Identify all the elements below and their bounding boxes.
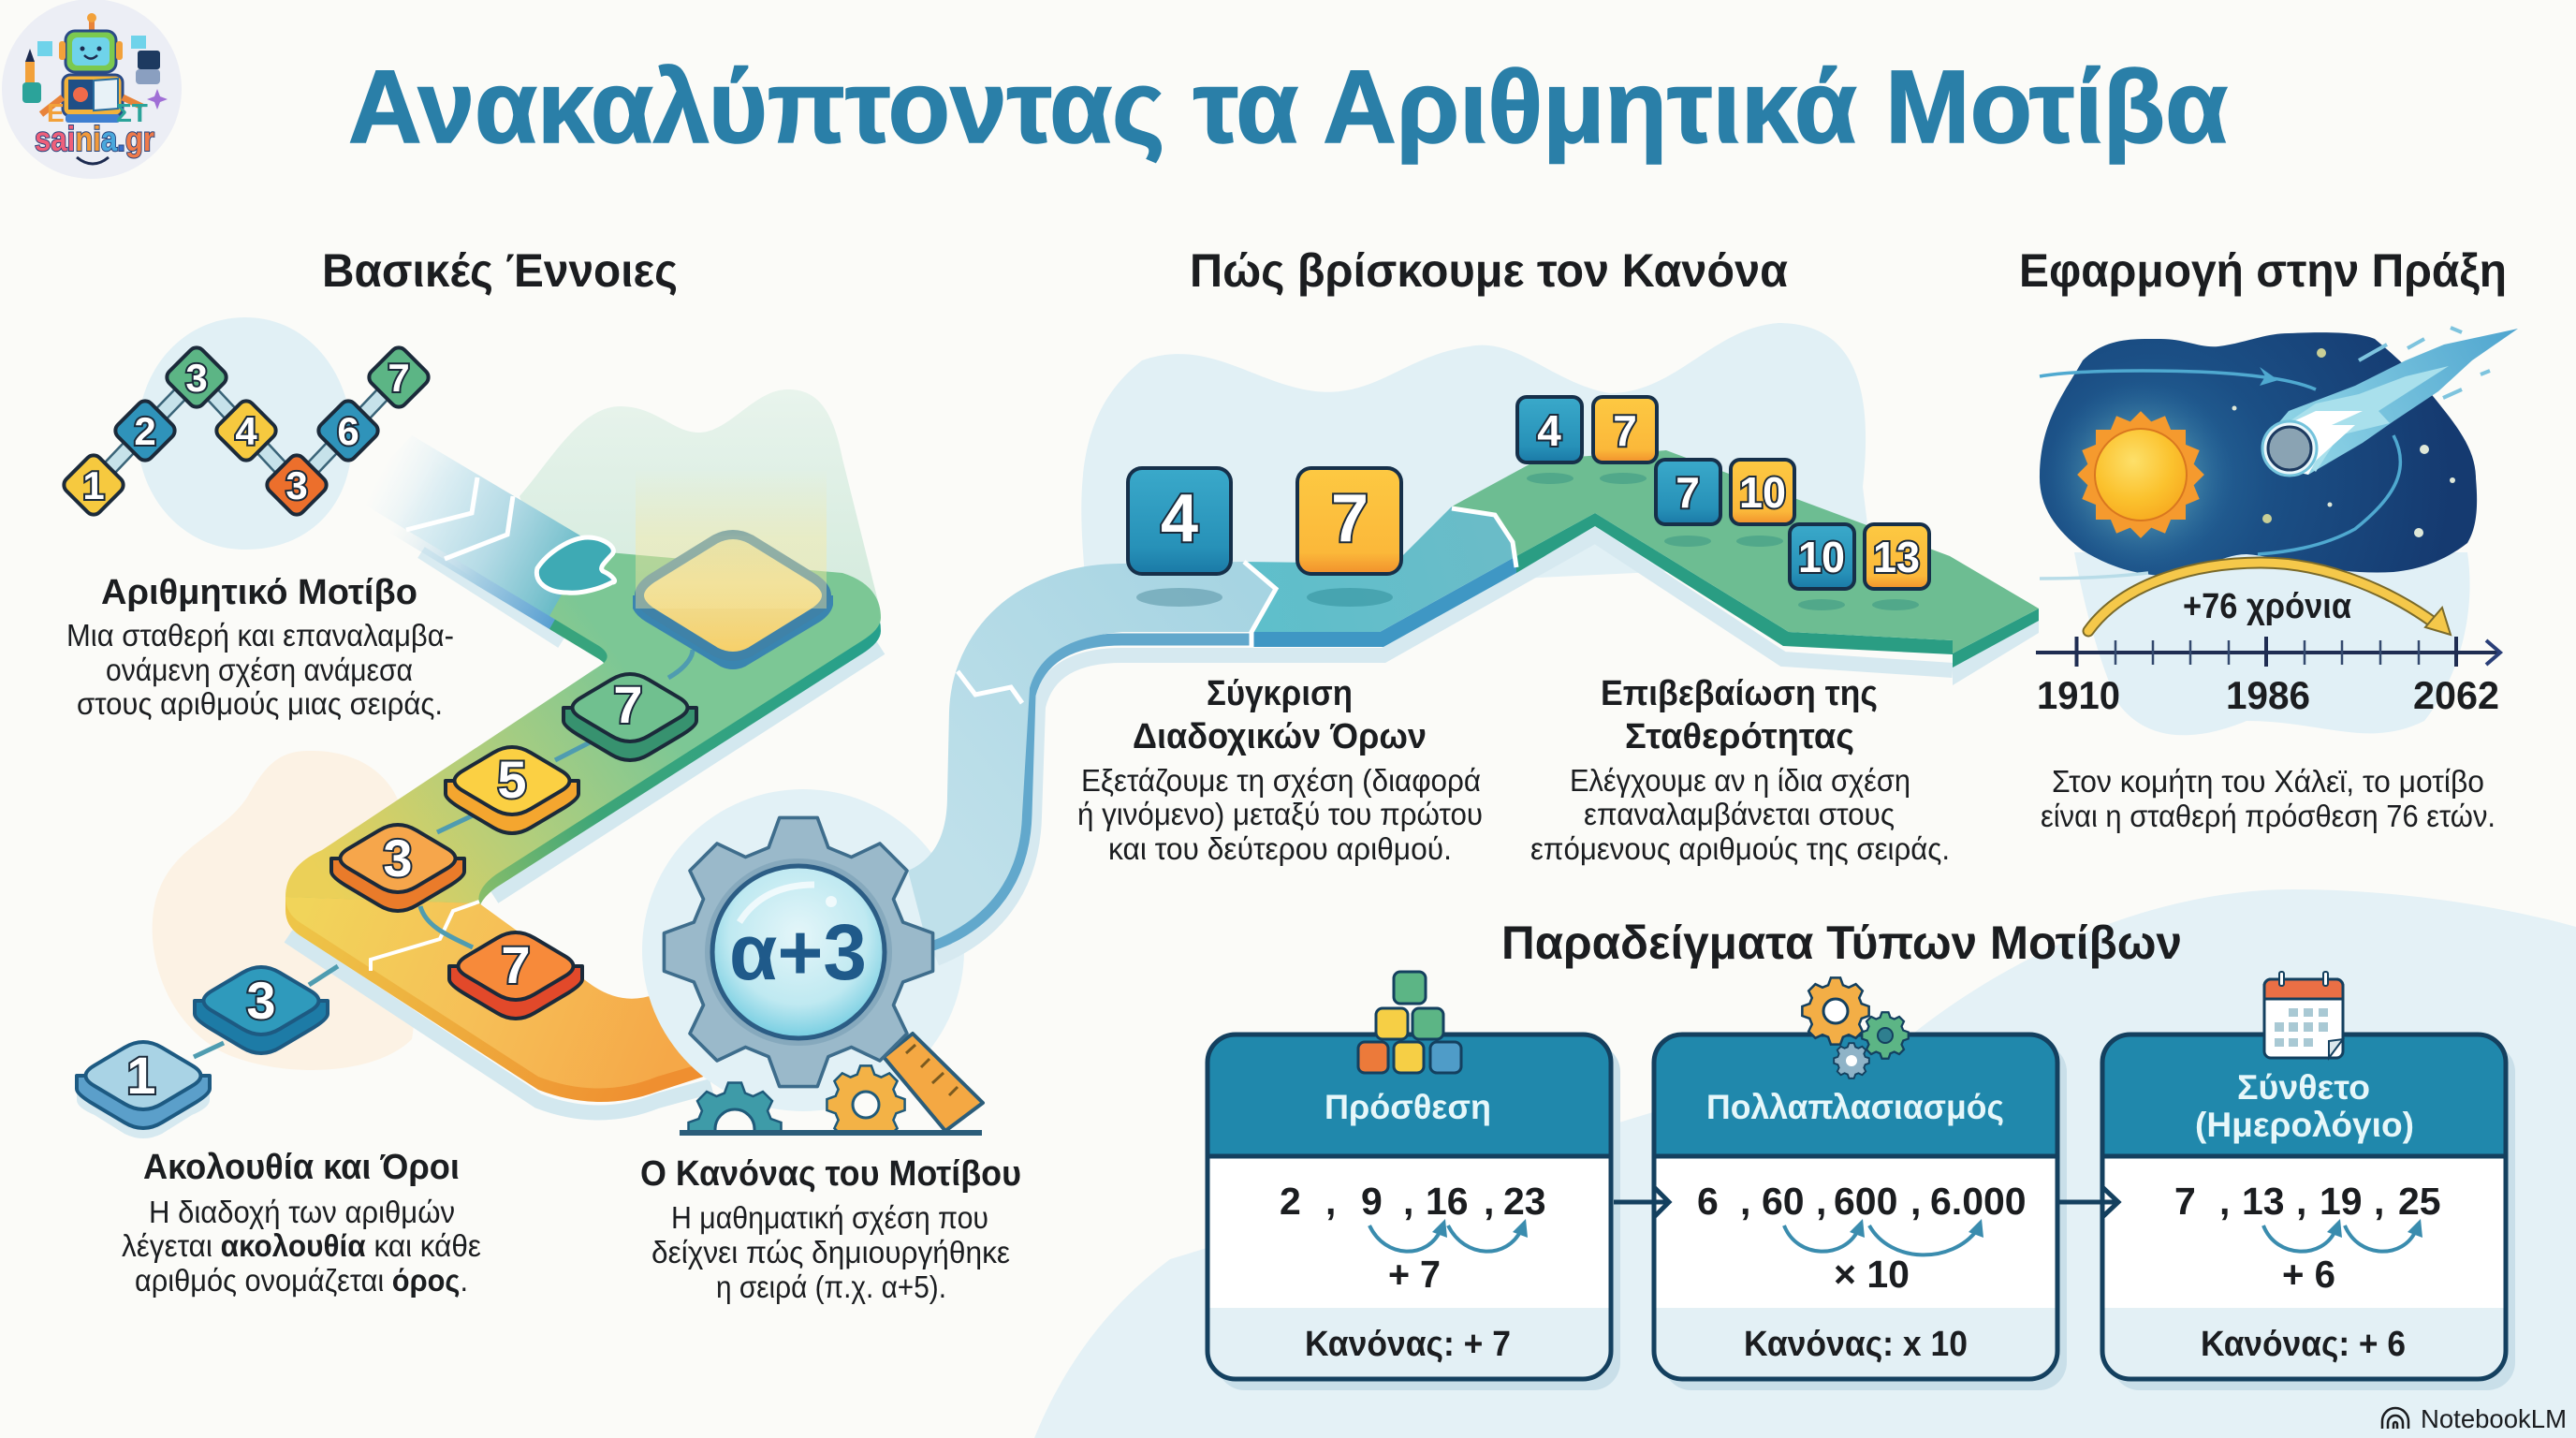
card: Πολλαπλασιασμός — [1654, 1034, 2067, 1390]
tiles: small pairs: 10 — [1739, 468, 1786, 517]
tiles: small pairs — [1517, 397, 1929, 610]
background blob: lower right — [1034, 889, 2576, 1438]
text block: Σύγκριση Διαδοχικών Όρων: και του δεύτερου αριθμού. — [1108, 831, 1452, 866]
text block: Αριθμητικό Μοτίβο: στους αριθμούς μιας σειράς. — [77, 686, 443, 721]
tile: 7 green: 7 — [613, 675, 643, 734]
tile: 7 green — [564, 674, 696, 760]
tile: 1 light blue: 1 — [126, 1046, 156, 1105]
card: Πολλαπλασιασμός: 6 — [1697, 1180, 1719, 1223]
timeline 1910-2062: 2062 — [2413, 673, 2499, 717]
text block: Σύγκριση Διαδοχικών Όρων: Εξετάζουμε τη σχέση (διαφορά — [1081, 763, 1481, 798]
blob behind number chain — [138, 317, 352, 550]
text block: Ο Κανόνας του Μοτίβου: η σειρά (π.χ. α+5). — [716, 1269, 946, 1304]
tiles: big 4 and 7 — [1128, 468, 1401, 607]
hollow target tile — [633, 535, 833, 669]
comet illustration — [2040, 328, 2518, 579]
number chain: diamonds 1 2 3 4 3 6 7: 1 — [82, 463, 105, 507]
card: Πρόσθεση: 2 — [1280, 1180, 1301, 1223]
light beam above target — [636, 468, 827, 609]
tiles: big 4 and 7: 7 — [1331, 481, 1368, 556]
text block: Αριθμητικό Μοτίβο — [66, 573, 454, 721]
connector lines between tiles — [194, 650, 693, 1057]
timeline 1910-2062: 1986 — [2226, 673, 2310, 717]
card: Πρόσθεση: + 7 — [1388, 1253, 1441, 1296]
text block: Ακολουθία και Όροι — [122, 1148, 481, 1298]
number chain: diamonds 1 2 3 4 3 6 7: 2 — [134, 409, 156, 453]
card: Σύνθετο (Ημερολόγιο): Κανόνας: + 6 — [2201, 1325, 2406, 1364]
text block: Επιβεβαίωση της Σταθερότητας: Σταθερότητας — [1625, 717, 1854, 756]
number chain: diamonds 1 2 3 4 3 6 7: 3 — [285, 463, 308, 507]
tile: 3 blue — [195, 967, 328, 1053]
text block: Ο Κανόνας του Μοτίβου — [640, 1154, 1021, 1304]
text block: Ακολουθία και Όροι: λέγεται ακολουθία και κάθε — [122, 1228, 481, 1263]
arrow: card 2 to card 3 — [2059, 1187, 2118, 1217]
icon: stacked blocks — [1358, 972, 1461, 1073]
text block: Επιβεβαίωση της Σταθερότητας: Ελέγχουμε αν η ίδια σχέση — [1570, 763, 1910, 798]
text block: κομήτης του Χάλεϊ — [2041, 764, 2496, 833]
card: Σύνθετο (Ημερολόγιο) — [2102, 1034, 2515, 1390]
number chain: diamonds 1 2 3 4 3 6 7 — [61, 345, 432, 518]
text block: Σύγκριση Διαδοχικών Όρων — [1077, 674, 1483, 866]
logo: sainia.gr: ΣΤ — [116, 98, 148, 127]
card: Πολλαπλασιασμός: Πολλαπλασιασμός — [1706, 1088, 2004, 1126]
card: Πολλαπλασιασμός: , — [1910, 1180, 1921, 1223]
tiles: small pairs: 7 — [1613, 406, 1637, 455]
tiles: small pairs: 7 — [1676, 468, 1700, 517]
timeline 1910-2062: 1910 — [2037, 673, 2120, 717]
number chain: diamonds 1 2 3 4 3 6 7: 4 — [235, 409, 257, 453]
icon: calendar — [2264, 972, 2343, 1058]
text block: Ο Κανόνας του Μοτίβου: Ο Κανόνας του Μοτίβου — [640, 1154, 1021, 1194]
middle path ribbon — [908, 450, 2039, 959]
text block: Ακολουθία και Όροι: Η διαδοχή των αριθμών — [149, 1195, 455, 1229]
text block: Σύγκριση Διαδοχικών Όρων: Διαδοχικών Όρων — [1133, 717, 1427, 756]
text block: Επιβεβαίωση της Σταθερότητας: Επιβεβαίωση της — [1601, 674, 1878, 713]
NotebookLM mark: NotebookLM — [2421, 1404, 2567, 1433]
card: Πολλαπλασιασμός: 60 — [1762, 1180, 1805, 1223]
text block: κομήτης του Χάλεϊ: Στον κομήτη του Χάλεϊ, το μοτίβο — [2052, 764, 2484, 799]
card: Σύνθετο (Ημερολόγιο): (Ημερολόγιο) — [2195, 1106, 2414, 1144]
text block: Επιβεβαίωση της Σταθερότητας: επόμενους αριθμούς της σειράς. — [1530, 831, 1950, 866]
card: Πρόσθεση: 16 — [1426, 1180, 1469, 1223]
card: Σύνθετο (Ημερολόγιο): , — [2296, 1180, 2306, 1223]
card: Πρόσθεση: 9 — [1361, 1180, 1383, 1223]
card: Πολλαπλασιασμός: Κανόνας: x 10 — [1744, 1325, 1968, 1364]
logo: sainia.gr: sainia.gr — [35, 120, 154, 158]
text block: Αριθμητικό Μοτίβο: ονάμενη σχέση ανάμεσα — [106, 653, 413, 687]
card: Πολλαπλασιασμός: × 10 — [1834, 1253, 1910, 1296]
card: Πολλαπλασιασμός: 600 — [1834, 1180, 1897, 1223]
text block: Επιβεβαίωση της Σταθερότητας — [1530, 674, 1950, 866]
tile: 7 red — [449, 932, 582, 1019]
text block: Σύγκριση Διαδοχικών Όρων: Σύγκριση — [1207, 674, 1353, 713]
blob behind timeline — [2074, 552, 2470, 735]
card: Πρόσθεση: 23 — [1503, 1180, 1546, 1223]
text block: Ο Κανόνας του Μοτίβου: δείχνει πώς δημιουργήθηκε — [651, 1235, 1010, 1269]
heading: Εφαρμογή στην Πράξη: Εφαρμογή στην Πράξη — [2019, 244, 2507, 297]
timeline 1910-2062 — [2036, 563, 2500, 717]
card: Σύνθετο (Ημερολόγιο): 25 — [2398, 1180, 2441, 1223]
left path ribbon — [285, 435, 881, 1112]
card: Πολλαπλασιασμός: , — [1816, 1180, 1826, 1223]
peach blob behind tiles — [153, 751, 414, 1070]
heading: Βασικές Έννοιες: Βασικές Έννοιες — [322, 244, 678, 297]
card: Σύνθετο (Ημερολόγιο): , — [2374, 1180, 2384, 1223]
card: Σύνθετο (Ημερολόγιο): 13 — [2242, 1180, 2285, 1223]
card: Πολλαπλασιασμός: , — [1740, 1180, 1750, 1223]
gear with α+3 lens: α+3 — [729, 908, 867, 996]
card: Πρόσθεση: , — [1484, 1180, 1494, 1223]
tile: 5 yellow: 5 — [497, 750, 527, 809]
halo behind gear — [642, 789, 964, 1111]
card: Σύνθετο (Ημερολόγιο): 7 — [2174, 1180, 2196, 1223]
green hill behind plate — [520, 389, 880, 609]
icon: gears — [1802, 977, 1909, 1078]
card: Πρόσθεση: Πρόσθεση — [1325, 1088, 1491, 1126]
arrow: card 1 to card 2 — [1614, 1187, 1669, 1217]
logo: sainia.gr — [2, 0, 182, 179]
text block: Σύγκριση Διαδοχικών Όρων: ή γινόμενο) μεταξύ του πρώτου — [1077, 797, 1483, 831]
card: Σύνθετο (Ημερολόγιο): Σύνθετο — [2237, 1068, 2370, 1107]
text block: Ο Κανόνας του Μοτίβου: Η μαθηματική σχέση που — [671, 1200, 988, 1235]
tile: 3 orange — [331, 825, 464, 911]
card: Πρόσθεση: , — [1325, 1180, 1336, 1223]
card: Σύνθετο (Ημερολόγιο): + 6 — [2282, 1253, 2335, 1296]
text block: Επιβεβαίωση της Σταθερότητας: επαναλαμβάνεται στους — [1584, 797, 1895, 831]
title: Ανακαλύπτοντας τα Αριθμητικά Μοτίβα — [348, 50, 2228, 165]
tiles: small pairs: 13 — [1873, 533, 1920, 581]
tile: 1 light blue — [77, 1042, 210, 1138]
blob behind middle path — [1081, 323, 1872, 599]
timeline 1910-2062: +76 χρόνια — [2183, 587, 2351, 626]
card: Σύνθετο (Ημερολόγιο): 19 — [2320, 1180, 2363, 1223]
card: Πρόσθεση: , — [1403, 1180, 1413, 1223]
number chain: diamonds 1 2 3 4 3 6 7: 3 — [185, 356, 208, 400]
card: Πρόσθεση — [1208, 1034, 1620, 1390]
tile: 5 yellow — [446, 747, 578, 833]
heading: Παραδείγματα Τύπων Μοτίβων: Παραδείγματα Τύπων Μοτίβων — [1501, 917, 2182, 969]
text block: Ακολουθία και Όροι: Ακολουθία και Όροι — [143, 1148, 460, 1187]
card: Πολλαπλασιασμός: 6.000 — [1930, 1180, 2027, 1223]
tiles: small pairs: 10 — [1798, 533, 1845, 581]
text block: Ακολουθία και Όροι: αριθμός ονομάζεται όρος. — [135, 1263, 468, 1298]
number chain: diamonds 1 2 3 4 3 6 7: 6 — [337, 409, 359, 453]
text block: Αριθμητικό Μοτίβο: Μια σταθερή και επαναλαμβα- — [66, 618, 454, 653]
tiles: big 4 and 7: 4 — [1161, 481, 1198, 556]
logo: sainia.gr: Ε — [47, 98, 65, 127]
tile: 3 blue: 3 — [246, 971, 276, 1030]
tiles: small pairs: 4 — [1537, 406, 1561, 455]
tile: 3 orange: 3 — [383, 829, 413, 888]
text block: κομήτης του Χάλεϊ: είναι η σταθερή πρόσθεση 76 ετών. — [2041, 799, 2496, 833]
text block: Αριθμητικό Μοτίβο: Αριθμητικό Μοτίβο — [101, 573, 417, 612]
tile: 7 red: 7 — [501, 935, 531, 994]
gear with α+3 lens — [664, 817, 983, 1176]
number chain: diamonds 1 2 3 4 3 6 7: 7 — [388, 356, 410, 400]
card: Πρόσθεση: Κανόνας: + 7 — [1305, 1325, 1511, 1364]
card: Σύνθετο (Ημερολόγιο): , — [2219, 1180, 2230, 1223]
heading: Πώς βρίσκουμε τον Κανόνα: Πώς βρίσκουμε τον Κανόνα — [1190, 244, 1788, 297]
